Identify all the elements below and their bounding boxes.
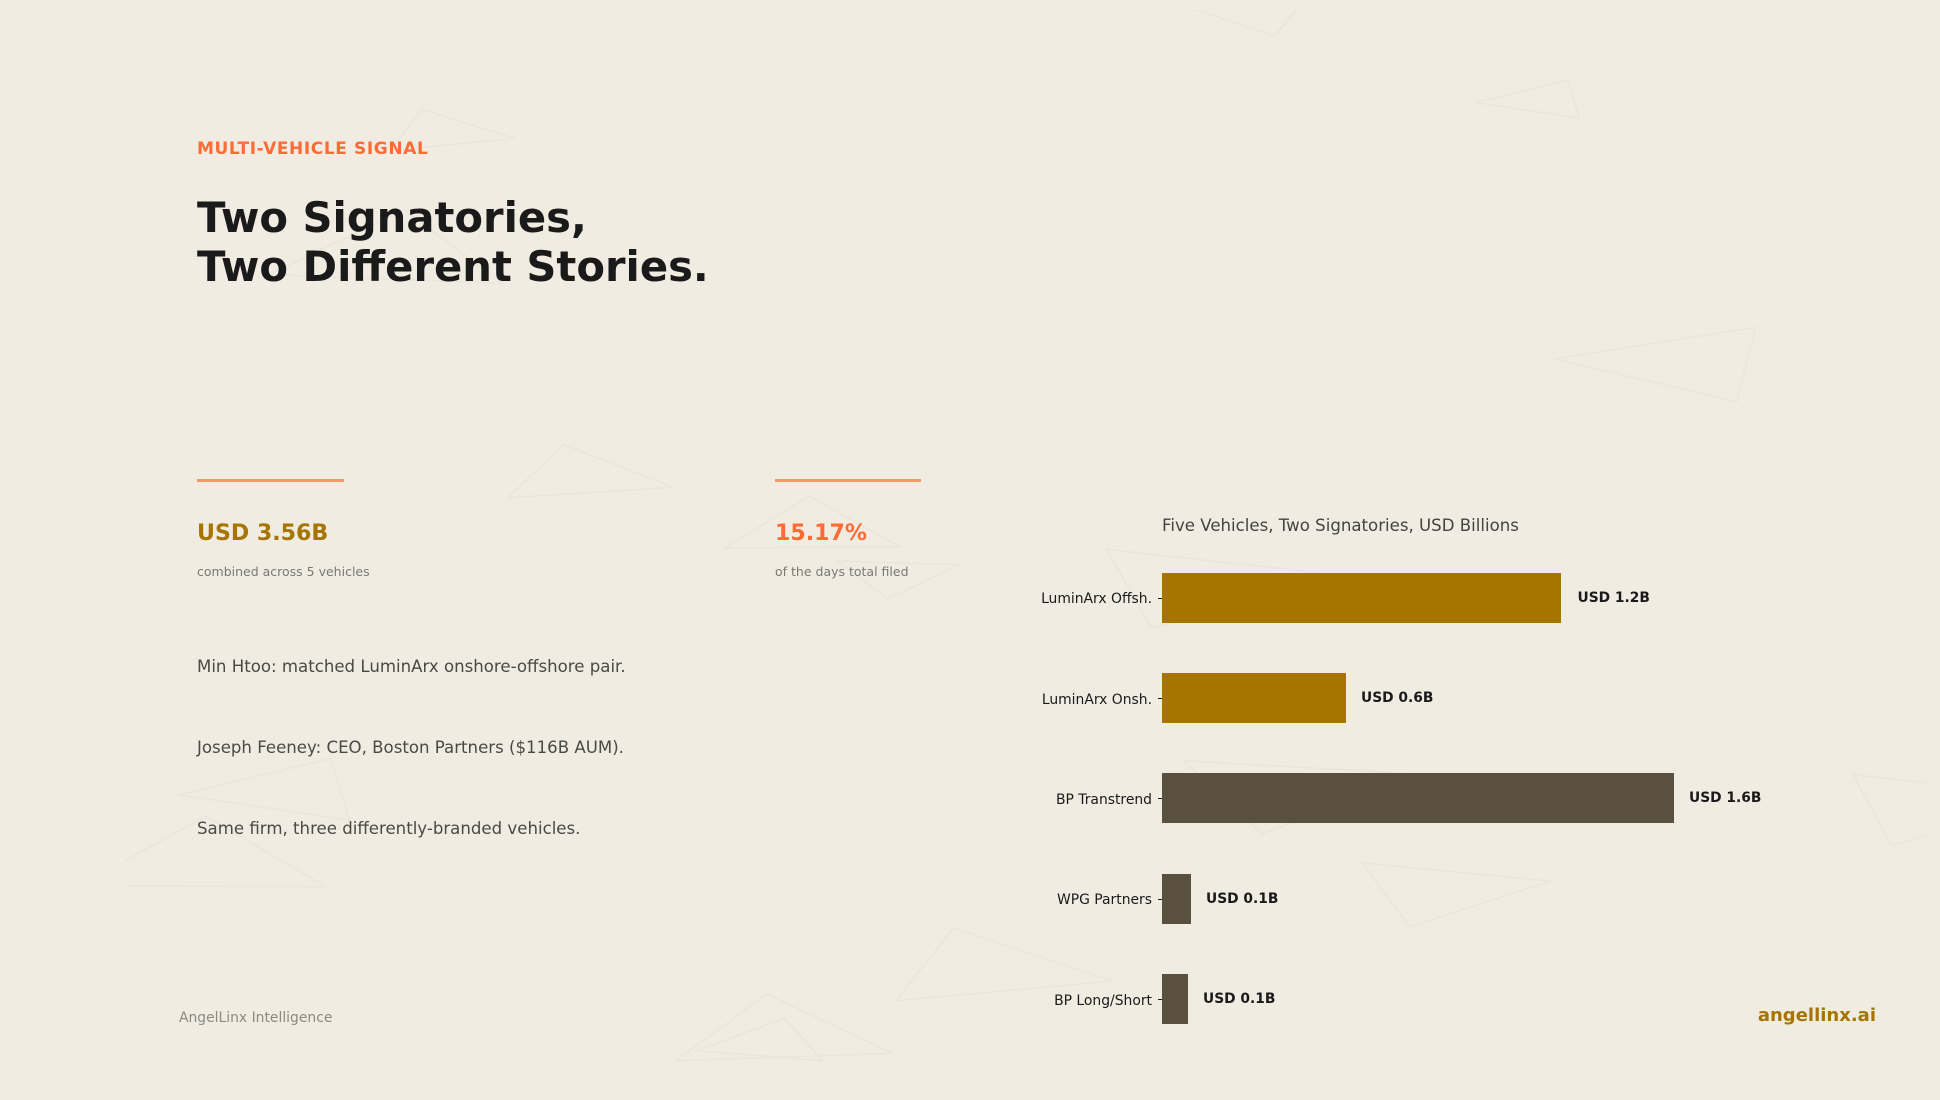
bar chart: WPG Partners	[1057, 892, 1152, 908]
bar chart: USD 1.2B	[1578, 590, 1650, 606]
bar chart: BP Long/Short	[1054, 993, 1152, 1009]
stat: days filed: 15.17%	[775, 520, 867, 546]
title	[197, 193, 709, 291]
bar: WPG Partners	[1057, 874, 1278, 924]
bar chart: LuminArx Onsh.	[1042, 692, 1152, 708]
stat: combined total: combined across 5 vehicles	[197, 564, 370, 578]
stat: combined total: USD 3.56B	[197, 520, 328, 546]
bar chart: LuminArx Offsh.	[1041, 591, 1152, 607]
title: Two Signatories,	[197, 193, 587, 242]
bar chart: USD 0.1B	[1203, 991, 1275, 1007]
chart title: Five Vehicles, Two Signatories, USD Billions	[1162, 516, 1519, 535]
body text: Same firm, three differently-branded vehicles.	[197, 819, 580, 838]
eyebrow label: MULTI-VEHICLE SIGNAL	[197, 139, 428, 159]
bar chart: USD 0.6B	[1361, 690, 1433, 706]
body text: Joseph Feeney: CEO, Boston Partners ($116B AUM).	[197, 738, 624, 757]
footer brand: angellinx.ai	[1758, 1005, 1876, 1026]
title: Two Different Stories.	[197, 242, 709, 291]
bar: LuminArx Offsh.	[1041, 573, 1650, 623]
footer source: AngelLinx Intelligence	[179, 1010, 332, 1026]
stat: days filed	[775, 479, 921, 578]
stat: combined total	[197, 479, 370, 578]
bar chart: USD 1.6B	[1689, 790, 1761, 806]
bar: BP Long/Short	[1054, 974, 1275, 1024]
bar: BP Transtrend	[1056, 773, 1761, 823]
bar chart: USD 0.1B	[1206, 891, 1278, 907]
bar chart: BP Transtrend	[1056, 792, 1152, 808]
bar: LuminArx Onsh.	[1042, 673, 1433, 723]
stat: days filed: of the days total filed	[775, 564, 909, 578]
body text: Min Htoo: matched LuminArx onshore-offshore pair.	[197, 657, 626, 676]
body text	[196, 657, 626, 838]
